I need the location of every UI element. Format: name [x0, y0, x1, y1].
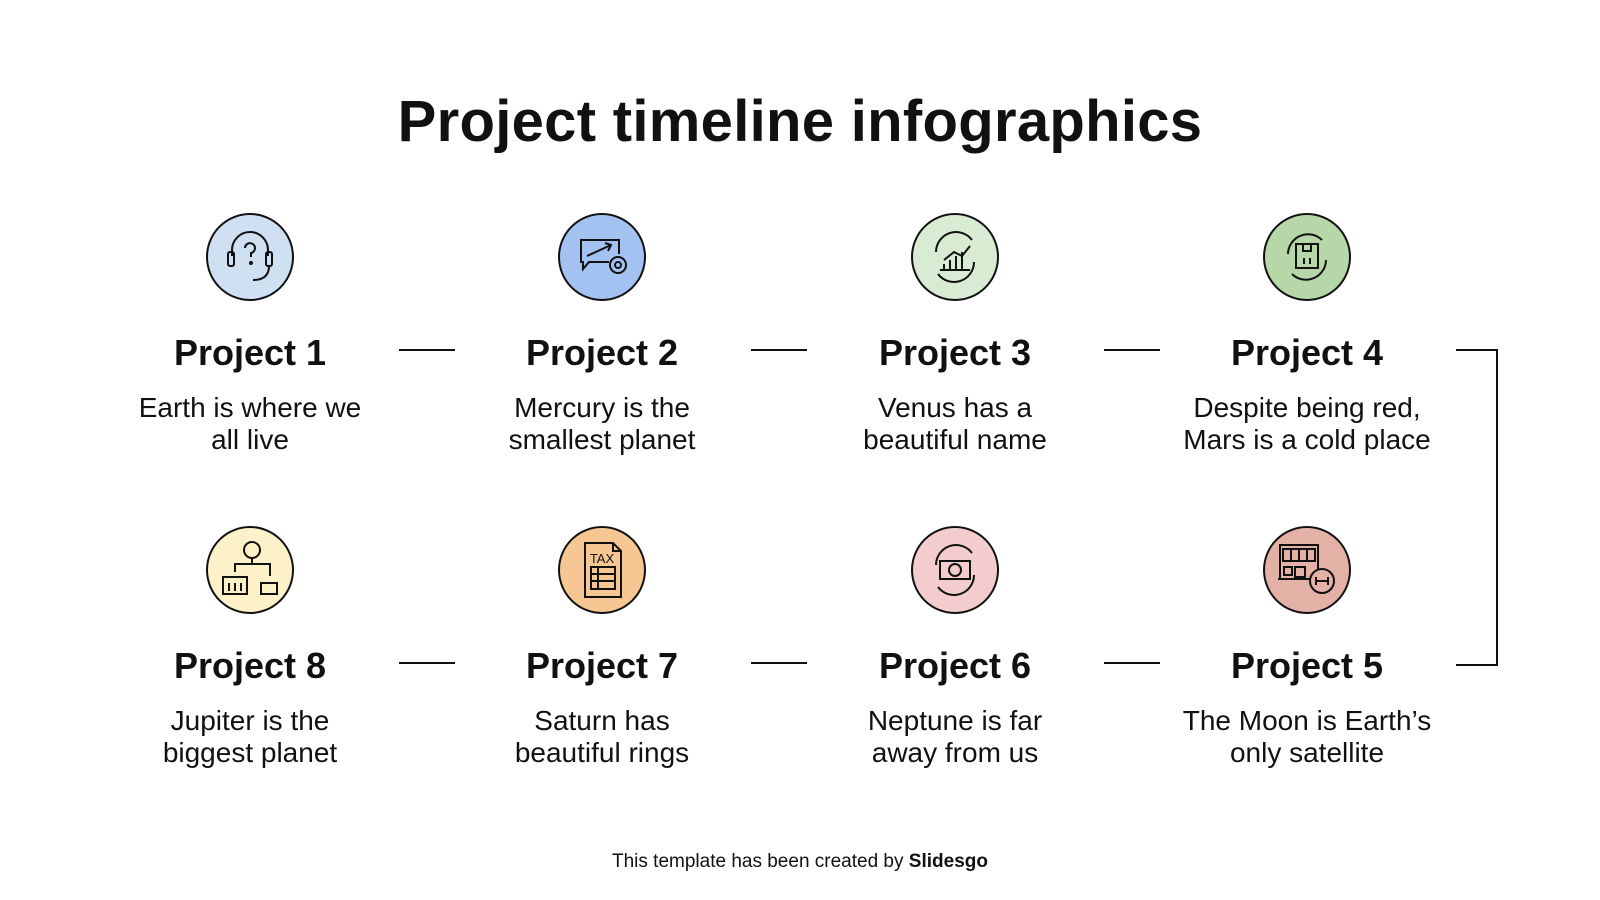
text: biggest planet	[163, 737, 337, 768]
connector lines	[399, 349, 455, 351]
item: project 2	[509, 213, 696, 455]
heading: Project 7	[526, 645, 678, 686]
text: beautiful name	[863, 424, 1047, 455]
heading: Project 1	[174, 332, 326, 373]
item: project 1	[139, 213, 361, 455]
text: only satellite	[1230, 737, 1384, 768]
text: Venus has a	[878, 392, 1032, 423]
heading: Project 6	[879, 645, 1031, 686]
text	[515, 705, 689, 768]
footer: This template has been created by Slidesgo	[612, 851, 988, 872]
icon: headset	[206, 213, 294, 301]
text: Jupiter is the	[171, 705, 329, 736]
heading: Project 3	[879, 332, 1031, 373]
item: project 4	[1183, 213, 1431, 455]
text: Despite being red,	[1193, 392, 1421, 423]
icon: box cycle	[1263, 213, 1351, 301]
icon: growth cycle	[911, 213, 999, 301]
heading: Project 8	[174, 645, 326, 686]
item: project 5	[1183, 526, 1431, 768]
text: Mars is a cold place	[1183, 424, 1431, 455]
arrow: bracket connector project 4 to 5	[1456, 349, 1498, 666]
title: Project timeline infographics	[398, 89, 1202, 154]
icon: shop money	[206, 526, 294, 614]
icon: chat gear	[558, 213, 646, 301]
text	[1183, 392, 1431, 455]
icon: money cycle	[911, 526, 999, 614]
icon: tax document: TAX	[590, 551, 614, 566]
text: beautiful rings	[515, 737, 689, 768]
text: Mercury is the	[514, 392, 690, 423]
text	[868, 705, 1042, 768]
heading: Project 5	[1231, 645, 1383, 686]
text: Saturn has	[534, 705, 670, 736]
item: project 7	[515, 526, 689, 768]
text: smallest planet	[509, 424, 695, 455]
text	[509, 392, 696, 455]
text	[139, 392, 361, 455]
text	[863, 392, 1047, 455]
item: project 6	[868, 526, 1042, 768]
text	[1183, 705, 1431, 768]
text	[163, 705, 337, 768]
item: project 3	[863, 213, 1047, 455]
icon: tax document	[558, 526, 646, 614]
heading: Project 2	[526, 332, 678, 373]
text: The Moon is Earth’s	[1183, 705, 1431, 736]
text: Earth is where we	[139, 392, 361, 423]
icon: gym	[1263, 526, 1351, 614]
text: away from us	[872, 737, 1038, 768]
heading: Project 4	[1231, 332, 1383, 373]
text: all live	[211, 424, 289, 455]
text: Neptune is far	[868, 705, 1042, 736]
item: project 8	[163, 526, 337, 768]
